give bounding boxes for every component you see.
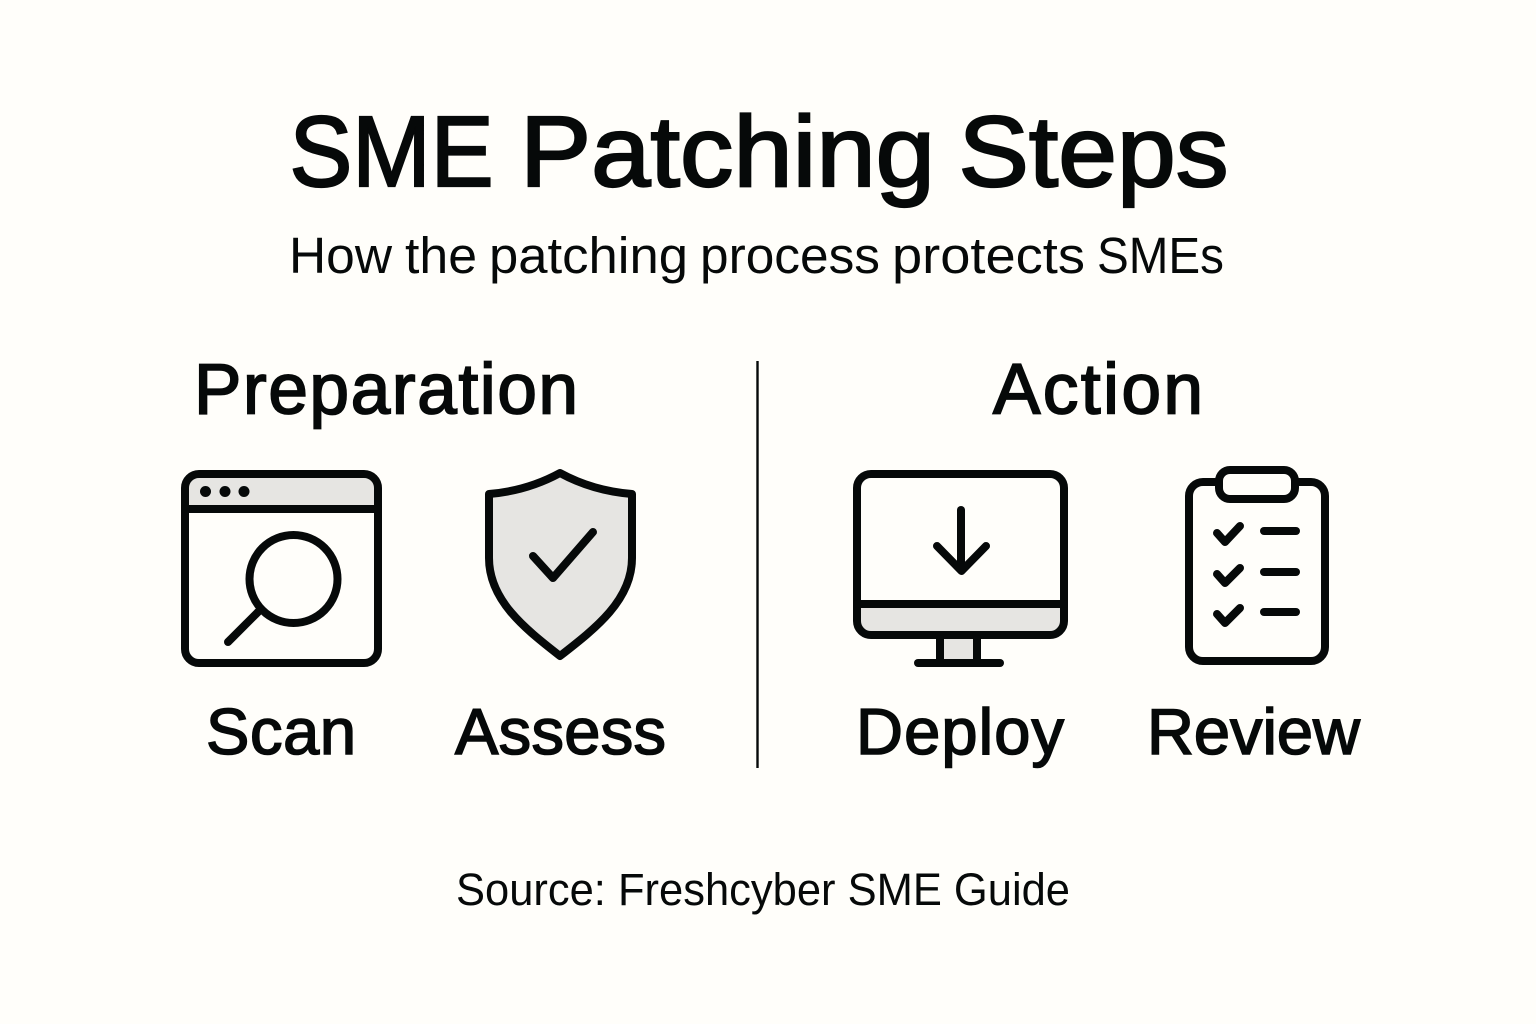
icon: clipboard checklist <box>1189 470 1325 661</box>
icon: shield with check <box>489 473 632 656</box>
icon: monitor with download arrow <box>857 474 1064 663</box>
title: Patching <box>520 96 935 208</box>
label: Deploy: Deploy <box>856 695 1064 768</box>
subtitle <box>289 227 1224 284</box>
vertical divider <box>756 361 759 768</box>
source note: Source: Freshcyber SME Guide <box>456 864 1070 915</box>
title: SME <box>290 96 494 208</box>
label: Scan: Scan <box>206 695 356 768</box>
label: Review: Review <box>1147 695 1361 768</box>
heading: Preparation: Preparation <box>194 350 578 430</box>
title <box>290 96 1228 208</box>
label: Assess: Assess <box>455 695 666 768</box>
subtitle: SMEs <box>1097 227 1224 284</box>
subtitle: How <box>289 227 392 284</box>
subtitle: process <box>700 227 880 284</box>
subtitle: patching <box>489 227 688 284</box>
subtitle: the <box>405 227 477 284</box>
title: Steps <box>958 96 1228 208</box>
subtitle: protects <box>892 227 1085 284</box>
heading: Action: Action <box>993 350 1203 430</box>
icon: browser window with magnifier <box>185 474 378 663</box>
